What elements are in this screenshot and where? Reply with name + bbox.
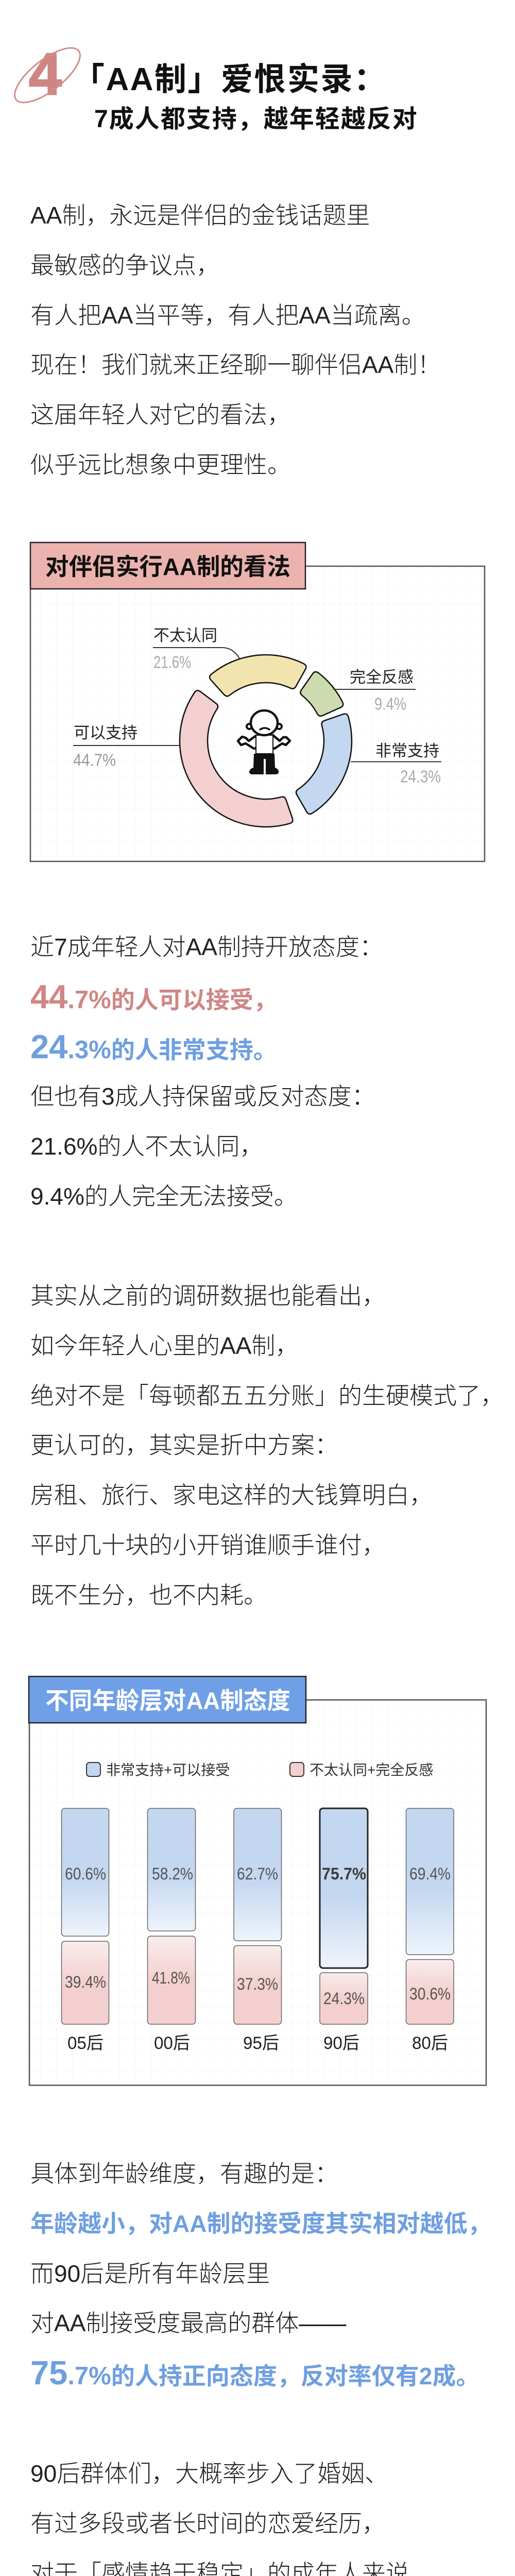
- heading: chart title: [29, 1676, 306, 1723]
- title block: [14, 45, 418, 133]
- text block: attitude breakdown: 近7成年轻人对AA制持开放态度：: [30, 934, 383, 960]
- bars: 05后: [62, 1808, 109, 2053]
- text block: attitude breakdown: 21.6%的人不太认同，: [30, 1133, 263, 1160]
- text block: compromise approach: 其实从之前的调研数据也能看出，: [30, 1282, 386, 1309]
- text block: attitude breakdown: 但也有3成人持保留或反对态度：: [30, 1083, 375, 1110]
- bars: 90后 highlighted: 24.3%: [323, 1989, 365, 2008]
- text block: intro: [30, 202, 441, 478]
- text block: intro: 似乎远比想象中更理性。: [30, 451, 291, 478]
- bars: 00后: [147, 1808, 196, 2053]
- heading: chart title: 不同年龄层对AA制态度: [45, 1687, 290, 1714]
- label: 完全反感: 完全反感: [350, 668, 414, 686]
- text block: age analysis: 75.7%的人持正向态度，反对率仅有2成。: [30, 2354, 479, 2392]
- text block: compromise approach: 更认可的，其实是折中方案：: [30, 1432, 338, 1459]
- text block: intro: 现在！我们就来正经聊一聊伴侣AA制！: [30, 351, 441, 378]
- bars: 95后: 62.7%: [237, 1865, 278, 1883]
- bars: 80后: [406, 1808, 454, 2053]
- label: 不太认同: 21.6%: [153, 652, 191, 672]
- legend: [87, 1762, 433, 1778]
- bars: 95后: 95后: [243, 2033, 279, 2053]
- bars: 05后: 05后: [67, 2033, 104, 2053]
- label: 可以支持: 可以支持: [74, 724, 138, 742]
- text block: compromise approach: 房租、旅行、家电这样的大钱算明白，: [30, 1482, 433, 1509]
- label: 不太认同: [153, 626, 239, 672]
- text block: intro: 有人把AA当平等，有人把AA当疏离。: [30, 302, 425, 329]
- panel frame: [29, 1700, 486, 2086]
- bars: 95后: [234, 1808, 281, 2053]
- bars: 00后: 00后: [154, 2033, 190, 2053]
- bars: 80后: 69.4%: [409, 1865, 451, 1883]
- bars: 80后: 30.6%: [409, 1985, 451, 2003]
- icon: shrugging person: [238, 710, 290, 774]
- text block: age analysis: 对AA制接受度最高的群体——: [30, 2310, 346, 2336]
- text block: intro: 最敏感的争议点，: [30, 252, 220, 279]
- text block: compromise approach: 如今年轻人心里的AA制，: [30, 1332, 299, 1359]
- text block: intro: AA制，永远是伴侣的金钱话题里: [30, 202, 370, 229]
- bars: 95后: 37.3%: [237, 1975, 278, 1993]
- bars: 00后: 58.2%: [152, 1865, 193, 1883]
- label: 可以支持: 44.7%: [73, 750, 116, 770]
- heading: subtitle: 7成人都支持，越年轻越反对: [94, 106, 418, 133]
- text block: attitude breakdown: [30, 934, 383, 1210]
- label: 非常支持: [351, 742, 441, 786]
- text block: compromise approach: 绝对不是「每顿都五五分账」的生硬模式了，: [30, 1382, 504, 1409]
- text block: age analysis: [30, 2160, 491, 2392]
- bars: 90后 highlighted: 90后: [323, 2033, 359, 2053]
- segment: 完全反感: [300, 672, 343, 716]
- donut chart: [180, 655, 352, 827]
- legend: 不太认同+完全反感: [310, 1762, 433, 1778]
- text block: attitude breakdown: 9.4%的人完全无法接受。: [30, 1183, 298, 1210]
- heading: main title: 「AA制」爱恨实录：: [73, 62, 387, 97]
- segment: 不太认同: [210, 655, 306, 696]
- text block: compromise approach: [30, 1282, 504, 1608]
- bars: 05后: 39.4%: [65, 1973, 106, 1991]
- text block: attitude breakdown: 24.3%的人非常支持。: [30, 1028, 277, 1065]
- bars: 00后: 41.8%: [152, 1969, 190, 1987]
- segment: 非常支持: [296, 714, 352, 814]
- text block: age analysis: 年龄越小，对AA制的接受度其实相对越低，: [30, 2210, 491, 2237]
- icon: number 4 in oval: [14, 45, 81, 107]
- panel: bars by age group: [28, 1675, 487, 2086]
- label: 完全反感: [333, 668, 416, 713]
- text block: 90s generation: [30, 2460, 409, 2576]
- label: 不太认同: 不太认同: [153, 626, 217, 645]
- text block: age analysis: 具体到年龄维度，有趣的是：: [30, 2160, 338, 2187]
- text block: intro: 这届年轻人对它的看法，: [30, 401, 291, 428]
- heading: chart title: 对伴侣实行AA制的看法: [45, 553, 290, 580]
- bars: 90后 highlighted: 75.7%: [322, 1865, 366, 1883]
- bars: 90后 highlighted: [320, 1808, 368, 2053]
- panel: donut chart of views on AA: [30, 542, 485, 862]
- bars: 80后: 80后: [412, 2033, 448, 2053]
- label: 可以支持: [73, 724, 179, 770]
- legend: 非常支持+可以接受: [106, 1762, 230, 1778]
- text block: 90s generation: 90后群体们，大概率步入了婚姻、: [30, 2460, 388, 2487]
- text block: compromise approach: 既不生分，也不内耗。: [30, 1582, 267, 1608]
- text block: 90s generation: 有过多段或者长时间的恋爱经历，: [30, 2510, 386, 2537]
- label: 非常支持: 非常支持: [375, 742, 439, 760]
- label: 完全反感: 9.4%: [374, 694, 406, 713]
- text block: attitude breakdown: 44.7%的人可以接受，: [30, 978, 277, 1015]
- text block: age analysis: 而90后是所有年龄层里: [30, 2260, 270, 2287]
- label: 非常支持: 24.3%: [400, 767, 441, 786]
- bars: 05后: 60.6%: [65, 1865, 106, 1883]
- heading: chart title: [30, 543, 305, 589]
- segment: 可以支持: [180, 690, 293, 827]
- panel frame: [30, 566, 485, 861]
- text block: compromise approach: 平时几十块的小开销谁顺手谁付，: [30, 1532, 386, 1558]
